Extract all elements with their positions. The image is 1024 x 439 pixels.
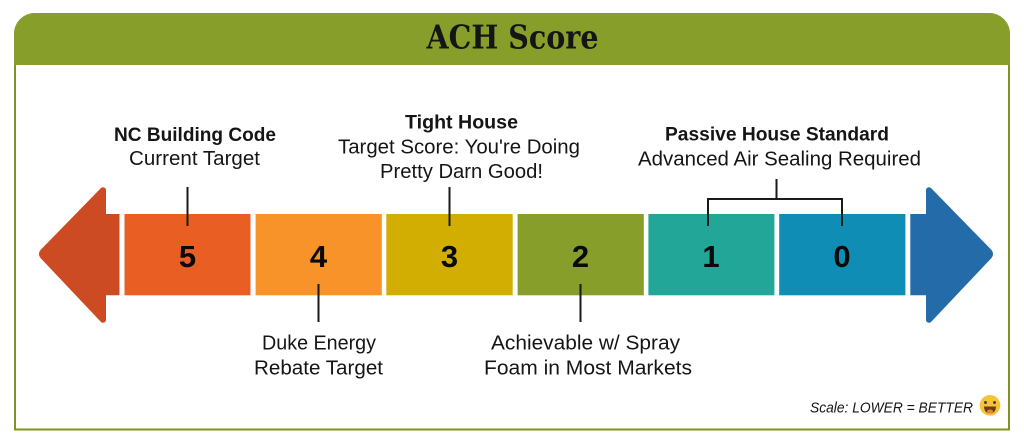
- connector: NC Building Code to 5: [186, 187, 188, 226]
- label: Duke Energy: Duke Energy: [262, 332, 376, 354]
- scale segment 4: [256, 214, 382, 295]
- label: Duke Energy: [254, 332, 383, 380]
- label: Passive House Standard: Passive House Standard: [665, 124, 889, 146]
- label: Passive House Standard: Advanced Air Sealing Required: [638, 148, 921, 170]
- scale segment 0: [779, 214, 905, 295]
- bracket: Passive House to 1 and 0: [708, 179, 842, 226]
- label: Tight House: Target Score: You're Doing: [338, 136, 580, 158]
- label: Tight House: Pretty Darn Good!: [380, 161, 543, 183]
- label: Tight House: Tight House: [405, 112, 518, 134]
- label: Tight House: [338, 112, 580, 183]
- scale segment 3: 3: [441, 239, 458, 274]
- label: Passive House Standard: [638, 124, 921, 170]
- scale note: Scale: LOWER = BETTER: [810, 400, 973, 416]
- label: Duke Energy: Rebate Target: [254, 358, 383, 380]
- label: NC Building Code: [114, 124, 276, 170]
- scale segment 0: 0: [833, 239, 851, 274]
- scale segment 2: 2: [572, 239, 589, 274]
- panel: title band: [14, 13, 1010, 65]
- arrow: left, worse: [39, 187, 120, 323]
- connector: spray foam to 2: [580, 284, 582, 322]
- scale segment 2: [518, 214, 644, 295]
- label: NC Building Code: Current Target: [129, 148, 260, 170]
- icon: grinning emoji: [980, 395, 1000, 416]
- scale segment 4: 4: [310, 239, 328, 274]
- scale segment 5: 5: [179, 239, 196, 274]
- title: ACH Score: [426, 18, 598, 56]
- scale segment 3: [386, 214, 513, 295]
- label: NC Building Code: NC Building Code: [114, 124, 276, 146]
- label: spray foam: Foam in Most Markets: [484, 358, 692, 380]
- label: spray foam: [484, 332, 692, 380]
- scale segment 5: [124, 214, 250, 295]
- label: spray foam: Achievable w/ Spray: [491, 332, 680, 354]
- arrow: right, better: [910, 187, 993, 323]
- connector: Duke Energy to 4: [318, 284, 320, 322]
- connector: Tight House to 3: [448, 187, 450, 226]
- scale segment 1: 1: [702, 239, 720, 274]
- scale segment 1: [648, 214, 774, 295]
